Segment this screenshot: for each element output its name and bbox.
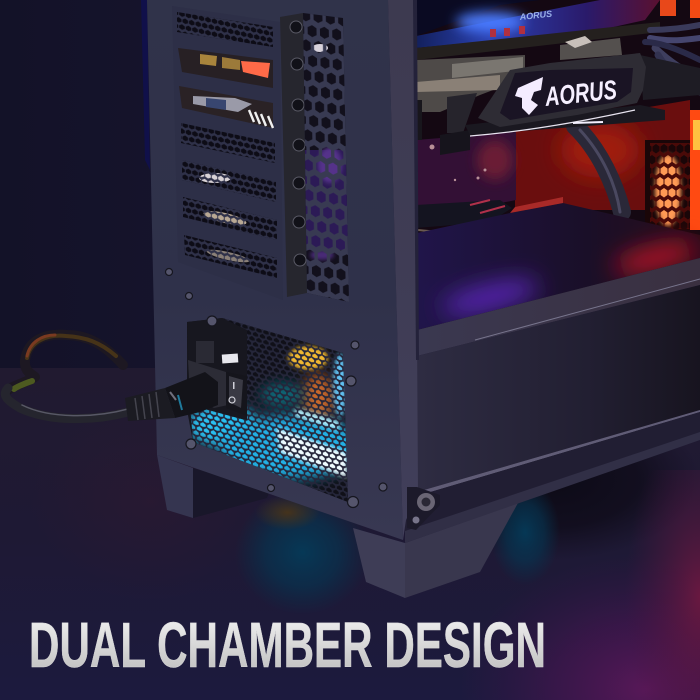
PSU basement top bbox=[417, 203, 700, 330]
GPU support arm bbox=[447, 93, 477, 133]
AORUS logo: AORUS bbox=[543, 75, 618, 112]
interior window: GPU and RGB chamber: AORUS bbox=[518, 9, 553, 22]
fan hex glow bbox=[645, 140, 695, 230]
slot 7 bbox=[184, 235, 277, 278]
board cables bbox=[416, 200, 512, 228]
case foot: rear left bbox=[157, 455, 270, 518]
slot 5 bbox=[182, 160, 276, 202]
thumb screw bracket bbox=[407, 487, 440, 530]
case: lower side panel bbox=[405, 258, 700, 543]
AORUS bracket bbox=[478, 53, 646, 127]
IEC socket and plug bbox=[125, 360, 228, 421]
perforated plate bbox=[303, 13, 349, 302]
icon: AORUS eagle bbox=[515, 77, 543, 115]
power switch bbox=[226, 372, 247, 416]
slot 2: HDMI ports bbox=[178, 48, 273, 88]
floor glow: cyan under case bbox=[235, 480, 560, 615]
slot 3: DVI port bbox=[179, 86, 273, 128]
case foot: front corner bbox=[353, 503, 518, 598]
interior window: GPU and RGB chamber bbox=[416, 0, 700, 330]
top lights bbox=[660, 0, 676, 16]
motherboard bbox=[418, 132, 516, 205]
expansion slots bbox=[172, 6, 283, 300]
sleeved power cables bbox=[575, 25, 700, 212]
slot 4 bbox=[181, 123, 275, 163]
PSU interior lights bbox=[190, 318, 348, 502]
slot 1 bbox=[177, 12, 273, 47]
corner column bbox=[388, 0, 418, 540]
right fan ring bbox=[690, 110, 700, 230]
heatsink bbox=[416, 55, 525, 112]
power cable bbox=[5, 335, 128, 419]
black plate bbox=[187, 318, 247, 420]
voltage selector bbox=[196, 341, 214, 363]
slot retention bracket bbox=[280, 10, 352, 306]
red back wall bbox=[515, 100, 690, 210]
case: rear panel bbox=[141, 0, 419, 540]
GPU backplate bbox=[416, 0, 660, 48]
slot 6 bbox=[183, 197, 277, 240]
PSU: socket plate and mesh bbox=[125, 318, 348, 502]
case screws bbox=[166, 268, 387, 508]
spec label bbox=[222, 353, 238, 364]
